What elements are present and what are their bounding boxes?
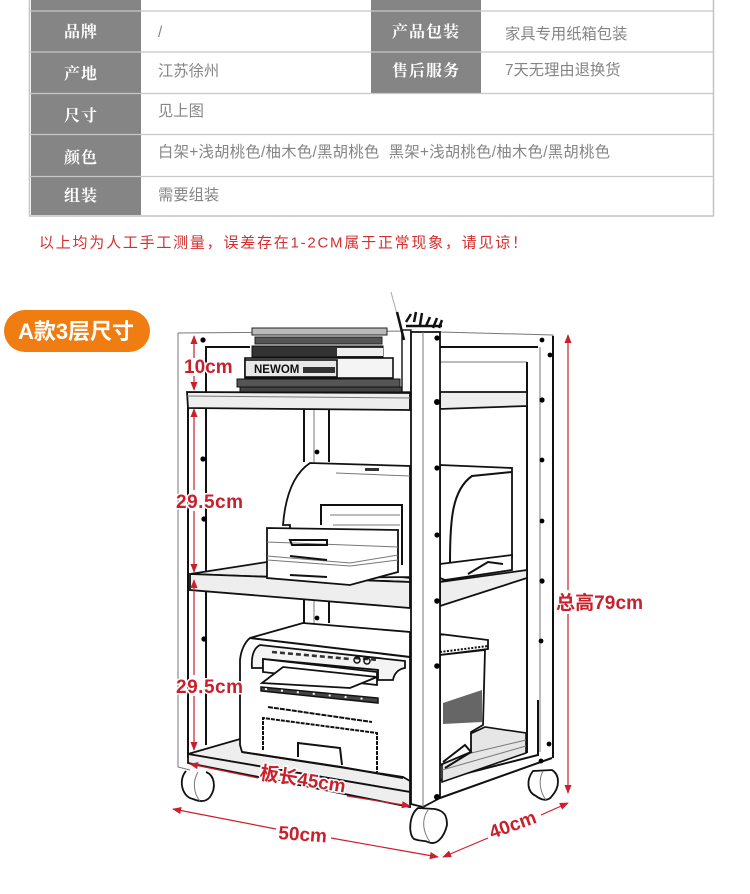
row: brand and packaging: 品牌 — [64, 23, 98, 41]
dimension: 10cm — [184, 336, 233, 390]
row: origin and after-sales: 售后服务 — [392, 61, 460, 80]
row: colour: 颜色 — [64, 148, 98, 167]
dimension: depth 40cm — [443, 803, 568, 857]
book stack: NEWOM — [254, 364, 299, 376]
size value: 见上图 — [158, 103, 204, 120]
caster right — [528, 770, 558, 800]
row: brand and packaging: 产品包装 — [392, 22, 460, 41]
upper printer — [267, 463, 512, 585]
row: origin and after-sales: 7天无理由退换货 — [505, 62, 621, 79]
row: brand and packaging — [64, 22, 627, 43]
row: assembly: 组装 — [64, 186, 98, 205]
front post — [411, 332, 440, 807]
badge: A款3层尺寸 — [4, 310, 150, 352]
back frame — [178, 331, 410, 770]
caster front — [410, 808, 447, 843]
dimension: lower 29.5cm: 29.5cm — [176, 677, 243, 698]
bottom shelf — [188, 727, 526, 807]
colour value: 白架+浅胡桃色/柚木色/黑胡桃色 黑架+浅胡桃色/柚木色/黑胡桃色 — [158, 144, 610, 161]
dimension: total height 79cm: 总高79cm — [556, 591, 643, 614]
badge: A款3层尺寸: A款3层尺寸 — [18, 319, 134, 344]
dimension: depth 40cm: 40cm — [487, 807, 539, 844]
dimension: board length 45cm — [190, 762, 410, 806]
row: brand and packaging: 家具专用纸箱包装 — [505, 26, 627, 43]
dimension: board length 45cm: 板长45cm — [258, 762, 347, 797]
dimension: 10cm: 10cm — [184, 357, 233, 378]
right post bolts — [539, 338, 552, 763]
row: origin and after-sales: 江苏徐州 — [158, 63, 219, 80]
pen holder — [391, 292, 442, 392]
middle shelf — [190, 562, 527, 608]
book stack — [237, 328, 403, 392]
row: origin and after-sales — [64, 61, 621, 83]
right frame back — [440, 332, 553, 798]
assembly value: 需要组装 — [158, 187, 219, 204]
dimension: width 50cm — [173, 809, 438, 857]
dimension: upper 29.5cm: 29.5cm — [176, 492, 243, 513]
specification table — [30, 0, 714, 216]
row: origin and after-sales: 产地 — [64, 64, 98, 83]
row: brand and packaging: / — [158, 24, 163, 41]
top shelf — [187, 392, 527, 410]
dimension: width 50cm: 50cm — [278, 823, 328, 847]
disclaimer note: 以上均为人工手工测量，误差存在1-2CM属于正常现象，请见谅！ — [39, 234, 527, 252]
shelf unit illustration — [178, 292, 558, 843]
row: size: 尺寸 — [64, 106, 98, 125]
lower printer — [240, 623, 488, 781]
caster left — [182, 771, 214, 801]
